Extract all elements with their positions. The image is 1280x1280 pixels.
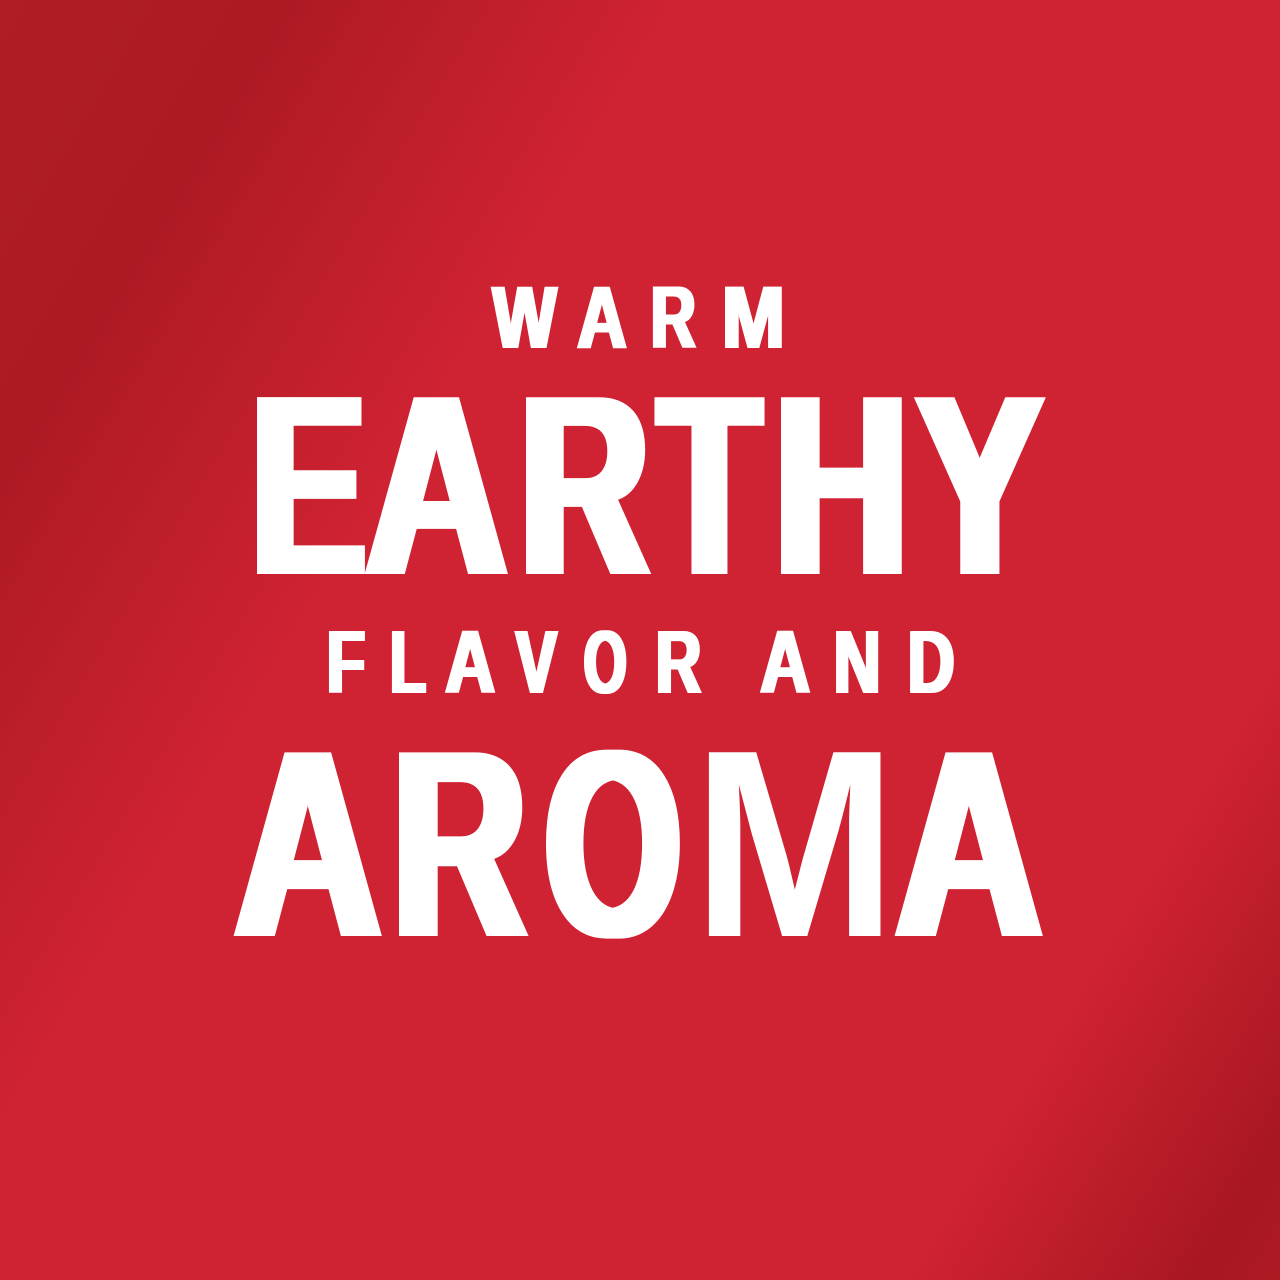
headline: WARM: A (577, 267, 627, 367)
headline: FLAVOR AND: D (908, 612, 954, 713)
headline: FLAVOR AND (327, 611, 954, 713)
headline: FLAVOR AND: N (834, 612, 880, 713)
headline: WARM: W (493, 268, 557, 367)
headline: EARTHY: H (775, 342, 908, 629)
headline: AROMA: M (692, 695, 897, 993)
headline: AROMA: R (393, 694, 526, 993)
headline: EARTHY: T (659, 341, 760, 629)
headline: EARTHY: A (366, 342, 507, 629)
headline: AROMA (234, 694, 1042, 993)
headline: FLAVOR AND: O (584, 611, 627, 712)
headline: AROMA: A (896, 695, 1042, 993)
headline: EARTHY (252, 341, 1043, 629)
headline: FLAVOR AND: A (760, 612, 810, 713)
headline: FLAVOR AND: A (445, 612, 495, 713)
headline: AROMA: O (545, 695, 681, 993)
headline: FLAVOR AND: R (656, 613, 701, 713)
headline: FLAVOR AND: L (390, 613, 426, 713)
headline: EARTHY: Y (917, 342, 1043, 629)
headline: FLAVOR AND: F (327, 613, 365, 713)
headline: WARM: M (722, 268, 785, 367)
headline: FLAVOR AND: V (516, 613, 557, 713)
headline: WARM: R (651, 269, 696, 368)
headline: EARTHY: R (520, 342, 649, 629)
headline: AROMA: A (234, 695, 381, 993)
headline: WARM (493, 267, 785, 368)
headline: EARTHY: E (252, 342, 366, 629)
